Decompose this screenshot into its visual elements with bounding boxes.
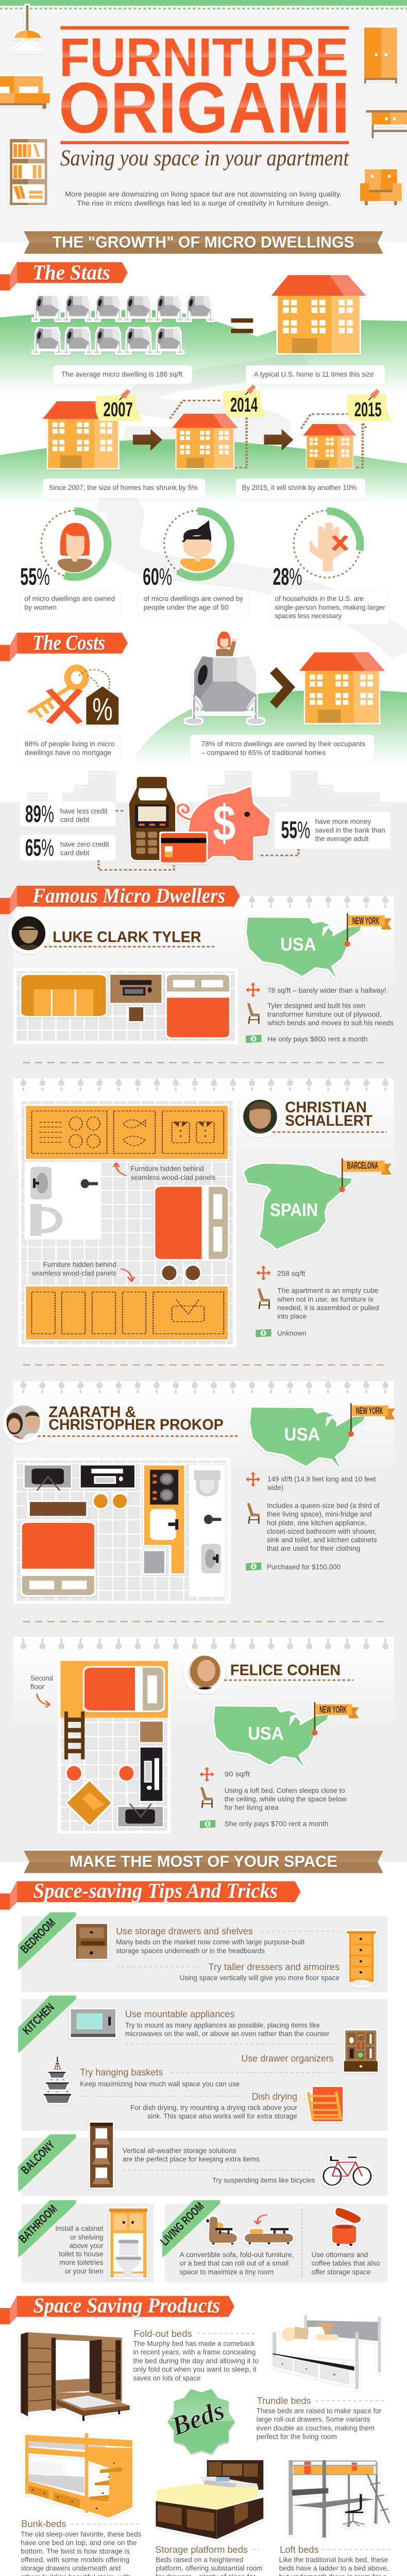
section: Christian Schallert	[18, 1097, 392, 1365]
tip: fold-out beds: in recent years, with a frame concealing	[133, 2348, 256, 2356]
hidden panel bottom	[26, 1286, 228, 1340]
tip: cabinet: above your	[70, 2242, 104, 2250]
second floor note: floor	[30, 1683, 45, 1691]
icon: bicycle	[324, 2156, 371, 2185]
tip: platform beds	[155, 2544, 263, 2576]
tip: cabinet: Install a cabinet	[55, 2225, 104, 2232]
house owners	[299, 652, 385, 723]
stat: 55 percent women: 55%	[20, 563, 50, 590]
tip: taller dressers: Try taller dressers and armoires	[209, 1961, 340, 1972]
tip: hanging baskets: Try hanging baskets	[80, 2067, 163, 2078]
caption: micro dwelling size: The average micro dwelling is 186 sq/ft	[61, 370, 182, 378]
name	[48, 1403, 224, 1433]
ladder	[64, 1711, 84, 1759]
stat: 89 percent less debt: card debt	[60, 816, 89, 824]
section: tips bedroom kitchen balcony	[18, 1912, 387, 2196]
bathroom	[25, 1163, 101, 1240]
dashed outline 2014	[170, 400, 247, 468]
portrait: Felice Cohen	[185, 1653, 224, 1692]
title rule top	[60, 26, 349, 29]
notebook page three	[13, 1381, 394, 1473]
name: ZAARATH &	[48, 1403, 136, 1420]
ribbon label: bathroom: BATHROOM	[16, 2202, 59, 2245]
tip: dish drying: Dish drying	[252, 2091, 297, 2102]
tip: trundle beds: Trundle beds	[257, 2395, 311, 2406]
armchair	[67, 1781, 111, 1825]
icon: vertical storage	[90, 2123, 113, 2188]
caption: no mortgage: 68% of people living in micro	[25, 740, 114, 748]
tip: cabinet: toilet to house	[59, 2250, 104, 2258]
panel: bathroom	[18, 2200, 154, 2282]
caption: micro dwelling size	[53, 365, 192, 384]
stat: 28 percent single person: spaces less necessary	[275, 612, 342, 620]
stat: 55 percent savings: have more money	[315, 818, 371, 825]
stat: 55 percent savings: 55%	[281, 816, 310, 843]
arrow and annotation: seamless wood-clad panels	[130, 1173, 215, 1181]
ribbon: famous micro dwellers: Famous Micro Dwellers	[32, 884, 225, 908]
tip: vertical storage: Vertical all-weather storage solutions	[123, 2146, 236, 2155]
tip: convertible: A convertible sofa, fold-out furniture,	[180, 2250, 294, 2259]
icon: piggy bank	[177, 787, 270, 860]
stat: 65 percent zero debt: 65%	[25, 834, 54, 861]
tip: fold-out beds: The Murphy bed has made a comeback	[133, 2340, 255, 2348]
facts: wide)	[267, 1483, 283, 1492]
section: title header	[0, 5, 407, 253]
icon: man	[180, 520, 215, 571]
panel: balcony	[18, 2123, 387, 2196]
ring 55 percent	[41, 511, 108, 578]
facts: 90 sq/ft	[225, 1770, 250, 1778]
kitchen counter	[144, 1465, 184, 1573]
stat: 60 percent under 50: 60%	[143, 563, 172, 590]
section: bed products	[5, 2433, 400, 2576]
facts: for her living area	[225, 1803, 279, 1811]
tip: storage drawers: Use storage drawers and shelves	[116, 1926, 253, 1937]
section: stats	[0, 261, 407, 653]
icon: desk	[366, 110, 407, 139]
facts	[199, 1767, 347, 1828]
notebook page four	[13, 1637, 394, 1729]
arrow	[255, 2215, 267, 2224]
facts: Purchased for $150,000	[267, 1563, 341, 1571]
bathroom	[189, 1465, 225, 1597]
big house	[272, 275, 366, 353]
tv	[25, 1465, 71, 1490]
section: famous micro dwellers, Luke Clark Tyler	[0, 886, 394, 1130]
stat: 89 percent less debt	[20, 800, 115, 827]
panel: kitchen	[18, 1995, 387, 2131]
caption: shrink 5 percent	[43, 479, 205, 497]
tip: bunk beds: storage drawers underneath and	[21, 2564, 121, 2572]
icon: microwave	[71, 2009, 115, 2037]
stat: 55 percent women: of micro dwellings are owned	[24, 595, 115, 603]
ribbon: the costs	[0, 631, 128, 661]
tip: vertical storage: are the perfect place for keeping extra items	[123, 2155, 260, 2163]
facts: that are used for their clothing	[267, 1544, 360, 1552]
tip: storage drawers: Many beds on the market now come with large purpose-built	[116, 1938, 304, 1946]
tip: platform beds: Storage platform beds	[155, 2544, 248, 2555]
tip: taller dressers	[116, 1961, 340, 1982]
icon: drying rack	[309, 2087, 343, 2121]
arrow and annotation: Furniture hidden behind	[130, 1165, 204, 1173]
tip: cabinet: or shelving	[70, 2233, 104, 2241]
tip: storage drawers: storage spaces underneath or in the headboards	[116, 1947, 265, 1955]
floor plan: Prokop	[13, 1458, 230, 1604]
tip: fold-out beds: the bed during the day and allowing it to	[133, 2357, 259, 2365]
tip: fold-out beds: only fold out when you want to sleep, it	[133, 2365, 257, 2374]
tip: dish drying: sink. This space also works well for extra storage	[147, 2112, 297, 2120]
badge text: beds: Beds	[167, 2396, 228, 2442]
note 2014: 2014	[230, 394, 258, 416]
floor plan: Tyler	[13, 968, 238, 1044]
map: USA	[247, 913, 392, 978]
stat: 65 percent zero debt	[20, 834, 115, 861]
icon: hanging lamp	[12, 5, 43, 52]
portrait: Christian Schallert	[241, 1097, 280, 1136]
arrow and annotation	[31, 1260, 134, 1282]
ribbon label: balcony: BALCONY	[19, 2138, 57, 2177]
stat: 89 percent less debt: have less credit	[60, 807, 108, 815]
icon: ottoman	[332, 2208, 361, 2246]
ribbon: space saving products	[0, 2294, 234, 2324]
tip: bunk beds: The old sleep-over favorite, these beds	[21, 2530, 142, 2538]
arrow two	[264, 429, 293, 451]
tip: bunk beds: bottom. The twist is how storage is	[21, 2547, 130, 2555]
map label: USA	[248, 1724, 284, 1743]
icon: card terminal	[129, 777, 175, 860]
intro text	[65, 190, 342, 207]
dollar sign: $	[213, 795, 235, 852]
image: storage platform bed	[156, 2460, 263, 2539]
icon: toilet cabinet	[109, 2209, 147, 2278]
tip: cabinet: more toiletries	[59, 2259, 104, 2266]
facts: 258 sq/ft	[277, 1269, 306, 1278]
stat: 55 percent women: by women	[24, 603, 57, 612]
title rule bottom	[60, 141, 349, 144]
bed	[155, 1187, 228, 1259]
side table	[140, 1722, 163, 1742]
desk	[81, 1465, 134, 1487]
tip: trundle beds: perfect for the living room	[257, 2433, 337, 2441]
tip: trundle beds	[257, 2395, 384, 2441]
ring 60 percent	[164, 511, 231, 578]
tv	[118, 1804, 163, 1826]
stat: 65 percent zero debt: have zero credit	[60, 840, 109, 849]
name: FELICE COHEN	[230, 1662, 341, 1679]
map: USA	[214, 1702, 359, 1767]
map: USA	[250, 1403, 395, 1468]
ribbon: famous micro dwellers	[0, 884, 240, 914]
tip: dish drying	[130, 2091, 297, 2120]
section: Zaarath and Christopher Prokop	[5, 1381, 395, 1622]
stat: 60 percent under 50: of micro dwellings are owned by	[144, 595, 243, 603]
notebook page two	[13, 1079, 394, 1176]
image: bunk bed	[25, 2433, 132, 2518]
floor plan: Cohen	[58, 1658, 171, 1834]
stat: 65 percent zero debt: card debt	[60, 849, 89, 857]
facts	[246, 982, 394, 1043]
second floor note: Second	[30, 1674, 53, 1682]
facts	[256, 1265, 379, 1337]
hidden panel top	[26, 1106, 228, 1159]
stat: 28 percent single person: 28%	[273, 563, 302, 590]
ribbon: tips and tricks	[0, 1879, 300, 1910]
icon: greater than	[270, 667, 295, 708]
city skyline background	[0, 771, 407, 825]
badge: beds	[167, 2389, 235, 2453]
name: CHRISTOPHER PROKOP	[48, 1416, 224, 1433]
panel: living room	[162, 2200, 387, 2282]
desk	[110, 975, 161, 1003]
tip: storage drawers	[116, 1926, 340, 1955]
hill three	[132, 690, 407, 763]
stat: 28 percent single person	[270, 563, 389, 625]
caption: typical home size	[246, 365, 385, 384]
icon: crossed out key	[28, 665, 89, 723]
facts: She only pays $700 rent a month	[225, 1820, 328, 1828]
connectors	[98, 849, 298, 870]
notebook page one	[13, 896, 394, 993]
caption: owned by occupants: – compared to 65% of traditional homes	[201, 749, 326, 757]
micro dwelling pods	[33, 296, 214, 353]
ring 28 percent	[294, 511, 361, 578]
tip: ottomans: offer storage space	[312, 2268, 370, 2276]
image: murphy bed	[21, 2332, 130, 2421]
name	[285, 1098, 372, 1129]
tip: fold-out beds: Fold-out beds	[133, 2328, 192, 2339]
bed	[167, 975, 229, 1038]
icon: woman on pod	[185, 632, 264, 724]
icon: drawers	[76, 1924, 107, 1959]
banner: make the most of your space	[24, 1851, 383, 1873]
tip: vertical storage	[123, 2146, 315, 2184]
stools	[94, 1494, 127, 1508]
tip: loft beds	[279, 2544, 390, 2576]
tip: cabinet	[55, 2225, 104, 2275]
icon: hanging baskets	[44, 2057, 71, 2103]
tip: hanging baskets: Keep maximizing how much wall space you can use	[80, 2080, 240, 2088]
bed	[22, 1523, 94, 1595]
note 2014	[223, 384, 267, 417]
stat: 89 percent less debt: 89%	[25, 800, 54, 827]
arrow and annotation: seamless wood-clad panels	[31, 1269, 116, 1277]
tip: platform beds: platform, offering substantial room	[156, 2564, 263, 2572]
equals sign	[231, 318, 253, 333]
caption: owned by occupants	[190, 735, 375, 762]
tip: bunk beds: offered, with some models offering	[21, 2556, 129, 2564]
icon: armchair	[360, 170, 402, 206]
section: Felice Cohen: NEW YORK	[319, 1704, 347, 1715]
image: trundle bed	[273, 2315, 381, 2389]
name: CHRISTIAN	[285, 1098, 367, 1115]
stat: 55 percent savings: the average adult	[315, 835, 368, 843]
connector	[115, 808, 125, 813]
caption: no mortgage	[19, 735, 121, 762]
hill one	[0, 310, 407, 393]
bench	[30, 1502, 86, 1516]
map: Spain	[244, 1158, 392, 1249]
map: Spain: SPAIN	[270, 1200, 318, 1221]
stat: 55 percent women	[20, 563, 121, 616]
house 2014	[172, 414, 238, 468]
tip: hanging baskets	[80, 2067, 336, 2096]
tip: bunk beds	[21, 2519, 142, 2576]
stat: 60 percent under 50	[138, 563, 249, 616]
tip: fold-out beds: saves on lots of space	[133, 2374, 200, 2382]
tip: dish drying: For dish drying, try mounting a drying rack above your	[130, 2104, 297, 2111]
hill two	[0, 439, 407, 503]
map label: USA	[280, 935, 316, 955]
ribbon: the costs: The Costs	[32, 631, 105, 655]
tip: ottomans	[312, 2250, 380, 2276]
name: LUKE CLARK TYLER	[53, 928, 201, 945]
icon: dresser	[347, 1931, 377, 1986]
caption: no mortgage: dwellings have no mortgage	[25, 749, 111, 757]
icon: wardrobe	[364, 27, 397, 83]
icon: fold-out sofa	[245, 2228, 293, 2244]
note 2007: 2007	[104, 399, 133, 421]
map label: USA	[284, 1425, 320, 1445]
facts: into place	[277, 1312, 307, 1320]
tip: drawer organizers: Use drawer organizers	[242, 2053, 333, 2063]
dotted rule	[44, 944, 214, 949]
note 2007	[96, 389, 142, 421]
dashed outline 2015	[301, 414, 366, 468]
tip: vertical storage: Try suspending items like bicycles	[212, 2176, 315, 2184]
ribbon label: kitchen: KITCHEN	[20, 2001, 57, 2037]
portrait: Prokops	[5, 1403, 43, 1442]
icon: percent tag: %	[92, 691, 113, 727]
tip: convertible	[180, 2250, 294, 2276]
second floor note	[30, 1674, 53, 1707]
house 2007	[42, 401, 124, 468]
section: Felice Cohen	[0, 1637, 394, 1910]
ribbon: the stats: The Stats	[32, 261, 110, 284]
tip: fold-out beds	[133, 2328, 259, 2382]
tip: bunk beds: Bunk-beds	[21, 2519, 66, 2529]
ribbon label: living room: LIVING ROOM	[158, 2199, 207, 2248]
section: stat cards and costs	[0, 563, 407, 870]
stool	[129, 1007, 143, 1021]
panel: bedroom	[18, 1912, 387, 1992]
note 2015	[347, 389, 392, 421]
tip: cabinet: or your linen	[65, 2267, 104, 2275]
facts: Unknown	[277, 1329, 307, 1337]
arrow and annotation: Furniture hidden behind	[43, 1260, 116, 1268]
icon: sofa	[0, 76, 50, 109]
winding road background	[98, 360, 407, 653]
stools	[66, 1766, 133, 1781]
tip: ottomans: Use ottomans and	[312, 2250, 368, 2259]
stat: 60 percent under 50: people under the age of 50	[144, 603, 228, 612]
ribbon: space saving products: Space Saving Products	[33, 2294, 220, 2317]
stat: 55 percent savings	[275, 812, 390, 849]
section: tips bathroom and living room, products	[0, 2200, 387, 2453]
ribbon: the stats	[0, 261, 128, 291]
image: loft bed	[289, 2460, 389, 2537]
floor plan: Schallert	[18, 1098, 236, 1347]
chart: percentage rings	[41, 511, 361, 578]
tip: convertible: space to maximize a tiny room	[180, 2268, 274, 2276]
icon: drawer organizer	[344, 2030, 378, 2072]
portrait: Luke Clark Tyler	[10, 914, 47, 953]
icon: bookshelf	[10, 139, 47, 205]
icon: convertible sofa	[207, 2217, 237, 2245]
tip: platform beds: Beds raised on a heightened	[156, 2555, 244, 2564]
arrow and annotation	[113, 1163, 215, 1181]
icon: credit card	[161, 833, 207, 862]
loft bed	[84, 1668, 163, 1710]
ribbon label: bedroom: BEDROOM	[18, 1916, 58, 1956]
icon: woman	[58, 523, 92, 572]
tip: convertible: or a bed that can roll out of a small	[180, 2259, 289, 2267]
facts	[246, 1472, 380, 1571]
arrow one	[133, 429, 162, 451]
icon: hand with cross	[309, 522, 347, 572]
icon: percent tag	[79, 670, 118, 727]
sofa	[21, 975, 106, 1016]
tip: mountable appliances	[125, 2009, 336, 2044]
tip: bunk beds: have one bed on top, and one on the	[21, 2538, 137, 2547]
caption: shrink 5 percent: Since 2007, the size of homes has shrunk by 5%	[49, 484, 198, 492]
tip: mountable appliances: Use mountable appliances	[125, 2009, 234, 2019]
tip: loft beds: Loft beds	[280, 2544, 319, 2555]
desk	[141, 1748, 162, 1801]
stools	[162, 1266, 200, 1280]
caption: shrink 10 percent	[236, 479, 365, 497]
house 2015	[303, 424, 357, 468]
